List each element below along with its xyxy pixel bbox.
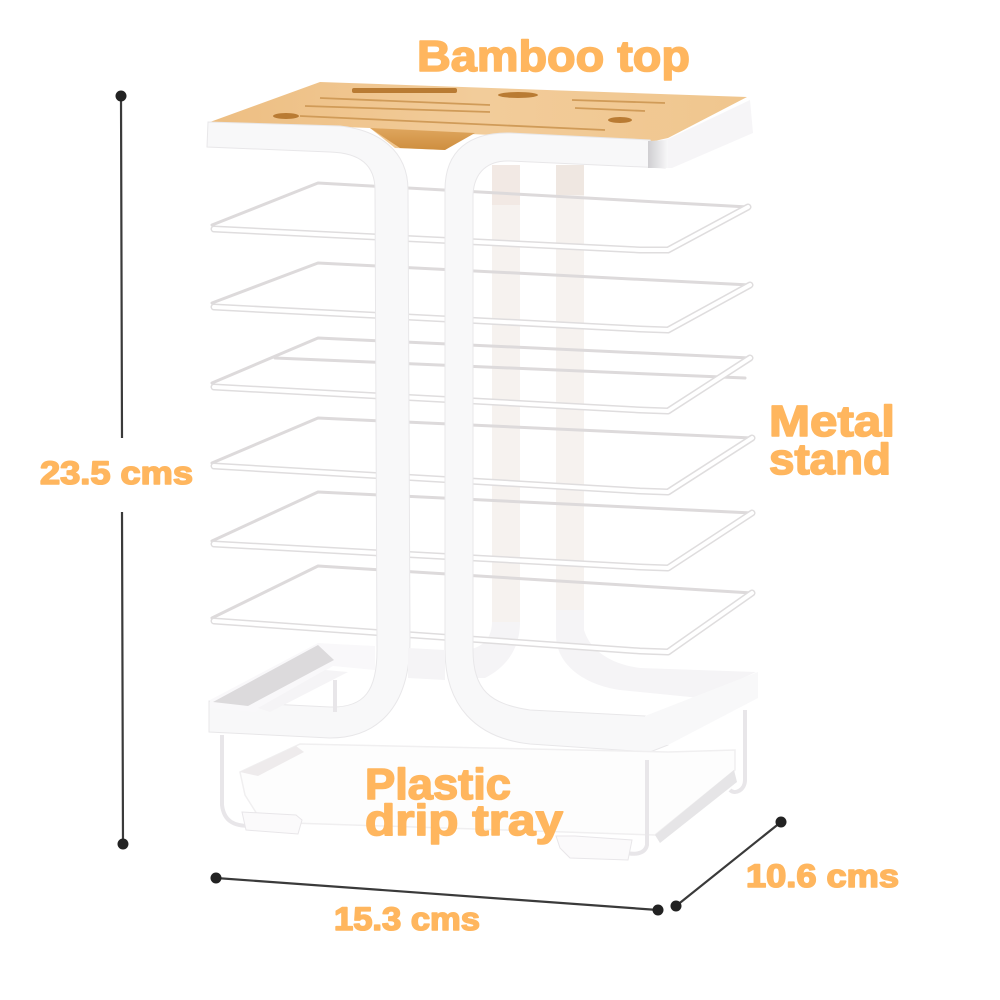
label: height 23.5 cms: 23.5 cms xyxy=(40,455,193,491)
label: plastic drip tray: Plastic xyxy=(365,760,511,809)
plastic drip tray xyxy=(240,744,737,843)
width dimension line xyxy=(210,872,664,916)
depth dimension line xyxy=(670,816,786,912)
bamboo top xyxy=(210,82,747,150)
left metal arch xyxy=(207,122,410,738)
label: metal stand xyxy=(769,397,895,484)
label: plastic drip tray xyxy=(365,760,564,845)
label: depth 10.6 cms: 10.6 cms xyxy=(746,858,899,894)
height dimension line xyxy=(116,90,128,850)
base frame rear xyxy=(210,643,758,745)
wire shelves xyxy=(212,183,752,652)
back uprights xyxy=(462,165,756,698)
label: metal stand: stand xyxy=(769,435,891,484)
feet and legs xyxy=(222,680,745,860)
label: width 15.3 cms: 15.3 cms xyxy=(334,901,480,937)
label: metal stand: Metal xyxy=(769,397,895,446)
right metal arch xyxy=(445,100,753,752)
label: plastic drip tray: drip tray xyxy=(365,796,564,845)
label: bamboo top: Bamboo top xyxy=(417,32,690,81)
